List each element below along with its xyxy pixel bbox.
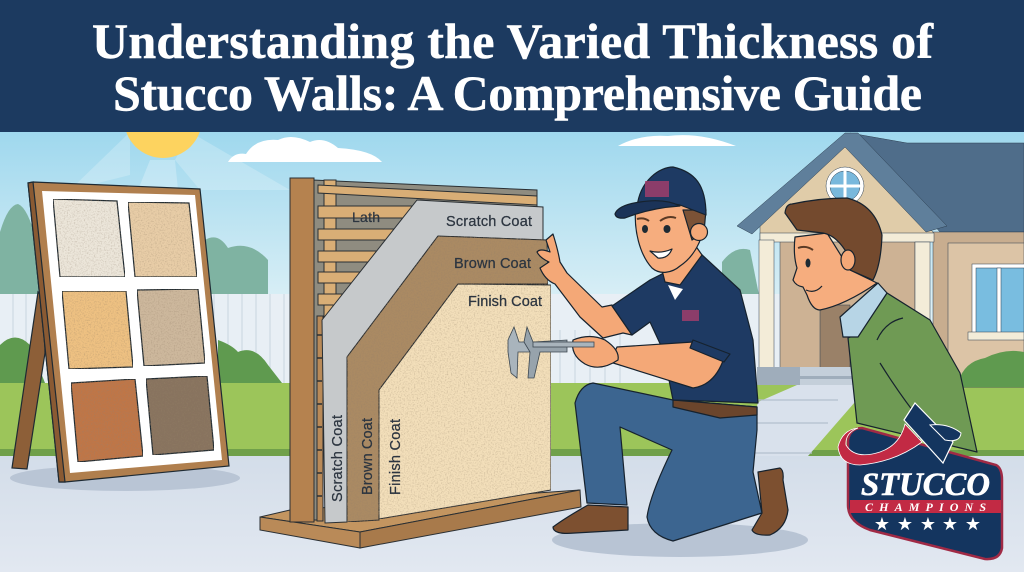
worker: cap: [637, 167, 706, 215]
logo trowel: [904, 403, 961, 463]
worker: eyebrows: [637, 217, 676, 221]
worker: raised arm and hand: [537, 234, 632, 338]
swatch: taupe stucco: [137, 289, 205, 366]
walkway and steps: [745, 385, 855, 456]
ground: [0, 456, 1024, 572]
house: porch beam: [760, 233, 934, 242]
label: finish coat: Finish Coat: [468, 294, 542, 310]
worker: hair: [683, 210, 706, 240]
background: sun and rays: [70, 80, 290, 190]
swatch: cream stucco: [53, 199, 125, 277]
wall cutaway model: [260, 178, 581, 548]
house: porch wall: [780, 240, 915, 370]
house: right column: [915, 242, 930, 332]
worker: belt: [673, 400, 757, 418]
finish coat layer: [379, 284, 551, 519]
swatch: sand stucco: [128, 202, 197, 277]
layer labels: [330, 209, 542, 502]
man: eyebrow: [798, 247, 813, 250]
worker: shirt: [612, 253, 758, 403]
logo wordmark: STUCCO: [861, 467, 990, 503]
label: vertical scratch coat: Scratch Coat: [330, 415, 346, 502]
house: main roof: [850, 133, 1024, 232]
background: clouds: [228, 135, 736, 162]
man: ear: [841, 250, 855, 270]
wood stud: [290, 178, 314, 522]
worker: cap badge: [645, 181, 669, 197]
board shadow: [10, 465, 240, 491]
background: lawn: [0, 383, 1024, 456]
background: right bushes: [957, 351, 1024, 387]
logo stars: ★★★★★: [874, 514, 981, 535]
man: eye: [806, 258, 810, 268]
swatch: dark brown stucco: [146, 376, 214, 455]
logo subtitle: CHAMPIONS: [865, 500, 986, 514]
worker: [537, 167, 788, 541]
worker: sleeve cuff: [690, 340, 730, 362]
board white panel: [42, 191, 222, 473]
logo: Stucco Champions: [838, 403, 1002, 559]
caliper tool: [508, 327, 594, 378]
worker: eyes: [642, 225, 670, 233]
worker: trousers: [575, 383, 762, 541]
worker: hand on caliper: [572, 336, 618, 367]
house: right wall: [933, 232, 1024, 387]
worker: front boot: [553, 505, 628, 533]
worker: smile: [650, 249, 672, 258]
worker: white undershirt: [668, 285, 683, 300]
house: round window: [826, 167, 864, 205]
label: vertical finish coat: Finish Coat: [388, 419, 404, 495]
house: window: [968, 264, 1024, 340]
house: left column: [759, 240, 774, 368]
logo swoosh: [838, 424, 922, 465]
worker shadow: [552, 523, 808, 557]
man in green sweater: [785, 198, 977, 452]
house: steps: [757, 367, 855, 385]
sample board: [12, 182, 229, 482]
worker: rear boot: [752, 468, 788, 535]
worker: face: [635, 205, 704, 272]
title line 2: Stucco Walls: A Comprehensive Guide: [113, 65, 922, 121]
label: vertical brown coat: Brown Coat: [360, 418, 376, 495]
swatch: terracotta stucco: [71, 379, 143, 462]
logo red band: [850, 500, 1001, 513]
scratch coat layer: [322, 200, 543, 523]
label: lath: Lath: [352, 209, 380, 225]
man: collar: [840, 283, 887, 337]
man: sweater: [848, 293, 977, 452]
house: gable roof: [737, 133, 947, 234]
background: picket fence: [0, 294, 780, 384]
man: hair: [785, 198, 882, 280]
wall base plate: [260, 490, 581, 548]
title line 1: Understanding the Varied Thickness of: [92, 13, 934, 69]
man: sweater fold lines: [877, 318, 920, 420]
background: sky: [0, 132, 1024, 332]
house: gable: [760, 145, 933, 240]
worker: neck: [660, 245, 702, 285]
title: [92, 13, 934, 121]
background: trees: [0, 204, 760, 300]
label: brown coat: Brown Coat: [454, 256, 531, 272]
swatch: ochre stucco: [62, 291, 133, 369]
worker: shirt badge: [682, 310, 699, 321]
man: face: [793, 233, 877, 310]
board frame: [28, 182, 229, 482]
house: door: [820, 305, 850, 369]
header bar: [0, 0, 1024, 132]
worker: cap bill: [615, 201, 680, 218]
label: scratch coat: Scratch Coat: [446, 214, 532, 230]
logo shield: [848, 428, 1002, 559]
board leg: [12, 292, 45, 469]
lath area: [313, 180, 537, 521]
man: smile: [806, 286, 822, 291]
house: [737, 133, 1024, 387]
background: left bushes: [0, 338, 282, 383]
brown coat layer: [347, 236, 548, 522]
worker: ear: [690, 224, 708, 240]
worker: forearm: [610, 342, 724, 388]
